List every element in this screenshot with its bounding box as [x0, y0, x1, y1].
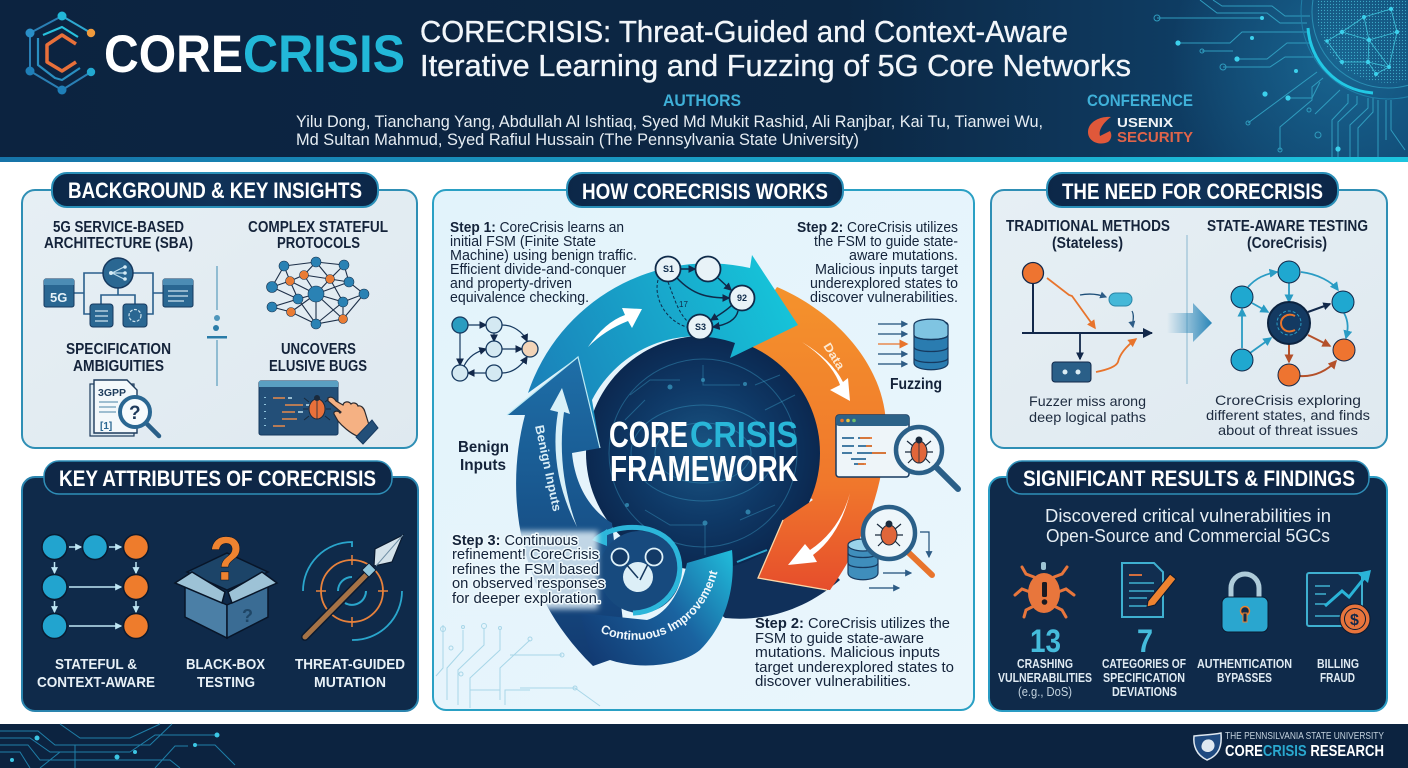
stat: crashing vulnerabilities — [998, 562, 1092, 699]
text: step 1: equivalence checking. — [450, 290, 589, 306]
conference: CONFERENCE — [1087, 91, 1193, 110]
sub-heading: state-aware testing — [1207, 218, 1368, 252]
heading: significant results — [1007, 461, 1369, 494]
arrow: continuous improvement: Continuous Improvement — [602, 570, 718, 640]
core title: CORE — [609, 414, 688, 455]
sub-heading: state-aware testing: STATE-AWARE TESTING — [1207, 218, 1368, 235]
text: step 1: Machine) using benign traffic. — [450, 248, 637, 264]
stat: crashing vulnerabilities: CRASHING — [1017, 657, 1073, 671]
icon: protocol network graph — [266, 257, 369, 329]
stat: categories of specification deviations: 7 — [1137, 623, 1153, 659]
icon: database and magnifier with bug — [848, 507, 932, 588]
panel: key attributes — [22, 461, 418, 711]
heading: key attributes — [44, 461, 392, 494]
label: threat-guided mutation: MUTATION — [314, 674, 386, 691]
logo wordmark — [104, 25, 405, 84]
text: step 3 — [448, 531, 605, 609]
text: corecrisis exploring: different states, and finds — [1206, 407, 1370, 423]
text: step 2 top: Malicious inputs target — [815, 262, 958, 278]
icon: bug — [1015, 562, 1074, 617]
label: stateful and context-aware — [37, 656, 155, 691]
sub-heading: uncovers elusive bugs: ELUSIVE BUGS — [269, 358, 367, 375]
label: stateful and context-aware: STATEFUL & — [55, 656, 137, 673]
logo icon — [26, 12, 95, 94]
text: fuzzer miss: deep logical paths — [1029, 409, 1146, 425]
footer circuit decoration — [0, 724, 235, 768]
sub-heading: 5G SBA: 5G SERVICE-BASED — [53, 219, 184, 236]
heading: background and key insights: BACKGROUND & KEY INSIGHTS — [68, 178, 362, 203]
text: step 1 — [450, 220, 637, 306]
fsm state diagram: 92 — [737, 293, 747, 303]
text: step 1: Efficient divide-and-conquer — [450, 262, 626, 278]
footer university mark: CORECRISIS RESEARCH — [1225, 743, 1384, 760]
icon: 5G service-based architecture diagram: 5G — [50, 290, 67, 305]
title: CORECRISIS: Threat-Guided and Context-Aware — [420, 14, 1068, 49]
icon: black box with question mark: ? — [242, 606, 253, 626]
sub-heading: 5G SBA: ARCHITECTURE (SBA) — [44, 235, 193, 252]
heading: how corecrisis works — [567, 173, 843, 207]
text: step 1: and property-driven — [450, 276, 572, 292]
icon: 3GPP document with magnifier — [90, 380, 159, 436]
heading: significant results: SIGNIFICANT RESULTS & FINDINGS — [1023, 466, 1355, 491]
icon: 3GPP document with magnifier: [1] — [100, 421, 112, 432]
label: black-box testing — [186, 656, 265, 691]
label: benign inputs: Inputs — [460, 457, 506, 474]
text: step 2 bottom: target underexplored states to — [755, 660, 954, 676]
icon: 3GPP document with magnifier: 3GPP — [98, 387, 126, 399]
icon: padlock — [1222, 574, 1268, 632]
core title — [609, 414, 798, 489]
label: threat-guided mutation: THREAT-GUIDED — [295, 656, 405, 673]
arrow: teal learning segment — [528, 255, 798, 448]
icon: document with pencil — [1122, 563, 1176, 617]
stat: categories of specification deviations: SPECIFICATION — [1103, 671, 1185, 685]
icon: state grid — [42, 534, 148, 638]
text: fuzzer miss — [1029, 393, 1146, 425]
diagram: stateless fuzzing — [1022, 262, 1153, 382]
text: discovered vulnerabilities: Discovered critical vulnerabilities in — [1045, 506, 1331, 526]
text: step 2 top: aware mutations. — [849, 248, 958, 264]
label on arrow: benign inputs: Benign Inputs — [532, 424, 564, 513]
authors: Yilu Dong, Tianchang Yang, Abdullah Al Ishtiaq, Syed Md Mukit Rashid, Ali Ranjbar, Kai Tu, Tianwei Wu, — [296, 113, 1043, 131]
text: step 2 bottom — [755, 616, 954, 690]
arrows on orange segment — [788, 340, 850, 565]
icon: code window with bug and pointing hand — [259, 381, 378, 444]
stat: crashing vulnerabilities: 13 — [1030, 623, 1061, 659]
icon: chart with dollar coin: $ — [1350, 612, 1359, 629]
fsm state diagram — [656, 256, 754, 340]
text: step 2 top: discover vulnerabilities. — [810, 290, 958, 306]
footer university mark — [1194, 731, 1384, 760]
text: corecrisis exploring: CroreCrisis exploring — [1215, 392, 1361, 408]
conference: USENIX — [1117, 115, 1173, 130]
sub-heading: uncovers elusive bugs: UNCOVERS — [281, 341, 356, 358]
stat: billing fraud: BILLING — [1317, 657, 1359, 671]
icon: black box with question mark: ? — [209, 525, 243, 594]
text: step 3: Step 3: Continuous — [452, 533, 578, 549]
icon: black box with question mark — [175, 525, 277, 638]
heading: how corecrisis works: HOW CORECRISIS WORKS — [582, 179, 828, 204]
text: discovered vulnerabilities — [1045, 506, 1331, 546]
text: step 3: for deeper exploration. — [452, 591, 601, 607]
icon: 3GPP document with magnifier: ? — [129, 403, 141, 424]
arrow: navy benign inputs segment — [507, 357, 625, 666]
stat: billing fraud — [1307, 570, 1371, 685]
text: step 2 bottom: Step 2: CoreCrisis utilizes the — [755, 616, 950, 632]
navy lower band — [690, 530, 840, 619]
circuit decoration — [436, 624, 600, 708]
footer banner — [0, 724, 1408, 768]
title — [420, 14, 1131, 83]
vertical separator — [207, 266, 227, 386]
text: step 3: refinement! CoreCrisis — [452, 547, 599, 563]
arrow: traditional to state-aware — [1167, 303, 1212, 342]
arrow: continuous improvement — [592, 550, 733, 666]
label: threat-guided mutation — [295, 656, 405, 691]
logo wordmark: CRISIS — [243, 25, 405, 84]
text: step 2 bottom: mutations. Malicious inputs — [755, 645, 940, 661]
label: stateful and context-aware: CONTEXT-AWARE — [37, 674, 155, 691]
stat: categories of specification deviations: CATEGORIES OF — [1102, 657, 1186, 671]
text: step 3: refines the FSM based — [452, 562, 599, 578]
icon: data to database — [878, 319, 948, 370]
text: step 2 top: underexplored states to — [810, 276, 958, 292]
label: benign inputs: Benign — [458, 439, 509, 456]
sub-heading: traditional methods — [1006, 218, 1170, 252]
label on arrow: data: Data — [820, 340, 848, 372]
sub-heading: complex stateful protocols: COMPLEX STATEFUL — [248, 219, 388, 236]
framework core disc — [586, 336, 820, 570]
conference — [1087, 91, 1193, 146]
title: Iterative Learning and Fuzzing of 5G Core Networks — [420, 48, 1131, 83]
text: fuzzer miss: Fuzzer miss arong — [1029, 393, 1146, 409]
sub-heading: specification ambiguities: SPECIFICATION — [66, 341, 171, 358]
stat: authentication bypasses — [1197, 574, 1292, 685]
sub-heading: traditional methods: TRADITIONAL METHODS — [1006, 218, 1170, 235]
label: benign inputs — [458, 439, 509, 474]
text: step 2 top — [797, 220, 958, 306]
panel: the need for corecrisis — [991, 173, 1387, 448]
stat: billing fraud: FRAUD — [1320, 671, 1355, 685]
sub-heading: complex stateful protocols — [248, 219, 388, 252]
text: step 2 top: Step 2: CoreCrisis utilizes — [797, 220, 958, 236]
text: corecrisis exploring — [1206, 392, 1370, 438]
fsm state diagram: 17 — [679, 300, 688, 309]
sub-heading: uncovers elusive bugs — [269, 341, 367, 375]
panel: significant results and findings — [989, 461, 1387, 711]
text: step 2 top: the FSM to guide state- — [814, 234, 958, 250]
icon: target and spear — [303, 535, 403, 640]
core title: FRAMEWORK — [610, 448, 798, 489]
diagram: state-aware testing graph — [1231, 261, 1355, 386]
sub-heading: traditional methods: (Stateless) — [1052, 235, 1123, 252]
sub-heading: 5G SBA — [44, 219, 193, 252]
icon: code window and magnifier with bug — [836, 415, 958, 489]
stat: crashing vulnerabilities: (e.g., DoS) — [1018, 685, 1072, 699]
stat: crashing vulnerabilities: VULNERABILITIES — [998, 671, 1092, 685]
text: corecrisis exploring: about of threat issues — [1218, 422, 1358, 438]
heading: the need for corecrisis — [1047, 173, 1338, 207]
icon: 5G service-based architecture diagram — [44, 258, 193, 327]
label: fuzzing: Fuzzing — [890, 376, 942, 393]
stat: authentication bypasses: BYPASSES — [1217, 671, 1272, 685]
small refinement loop — [592, 527, 681, 613]
conference: SECURITY — [1117, 129, 1193, 146]
core title: CRISIS — [690, 414, 798, 455]
text: discovered vulnerabilities: Open-Source and Commercial 5GCs — [1046, 526, 1330, 546]
sub-heading: state-aware testing: (CoreCrisis) — [1247, 235, 1327, 252]
text: step 2 bottom: discover vulnerabilities. — [755, 674, 911, 690]
label: black-box testing: TESTING — [197, 674, 255, 691]
header banner — [0, 0, 1408, 162]
fsm state diagram: S1 — [663, 264, 674, 274]
sub-heading: specification ambiguities: AMBIGUITIES — [73, 358, 164, 375]
heading: the need for corecrisis: THE NEED FOR CORECRISIS — [1062, 179, 1323, 204]
arrow: orange fuzzing segment body — [700, 287, 886, 590]
stat: categories of specification deviations — [1102, 563, 1186, 699]
small input state machine — [452, 317, 538, 381]
heading: key attributes: KEY ATTRIBUTES OF CORECRISIS — [59, 466, 376, 491]
panel: background and key insights — [22, 173, 417, 448]
label: black-box testing: BLACK-BOX — [186, 656, 265, 673]
authors — [296, 91, 1043, 149]
logo wordmark: CORE — [104, 25, 243, 84]
authors: Md Sultan Mahmud, Syed Rafiul Hussain (The Pennsylvania State University) — [296, 131, 859, 149]
sub-heading: complex stateful protocols: PROTOCOLS — [277, 235, 360, 252]
text: step 3: on observed responses — [452, 576, 605, 592]
arrow: orange head — [758, 500, 872, 590]
fsm state diagram: S3 — [695, 322, 706, 332]
stat: authentication bypasses: AUTHENTICATION — [1197, 657, 1292, 671]
sub-heading: specification ambiguities — [66, 341, 171, 375]
authors: AUTHORS — [663, 91, 741, 110]
text: step 1: initial FSM (Finite State — [450, 234, 596, 250]
circuit and globe decoration — [1154, 0, 1408, 157]
panel: how corecrisis works — [432, 172, 975, 711]
text: step 1: Step 1: CoreCrisis learns an — [450, 220, 624, 236]
text: step 2 bottom: FSM to guide state-aware — [755, 631, 924, 647]
heading: background and key insights — [52, 173, 378, 207]
stat: categories of specification deviations: DEVIATIONS — [1112, 685, 1177, 699]
